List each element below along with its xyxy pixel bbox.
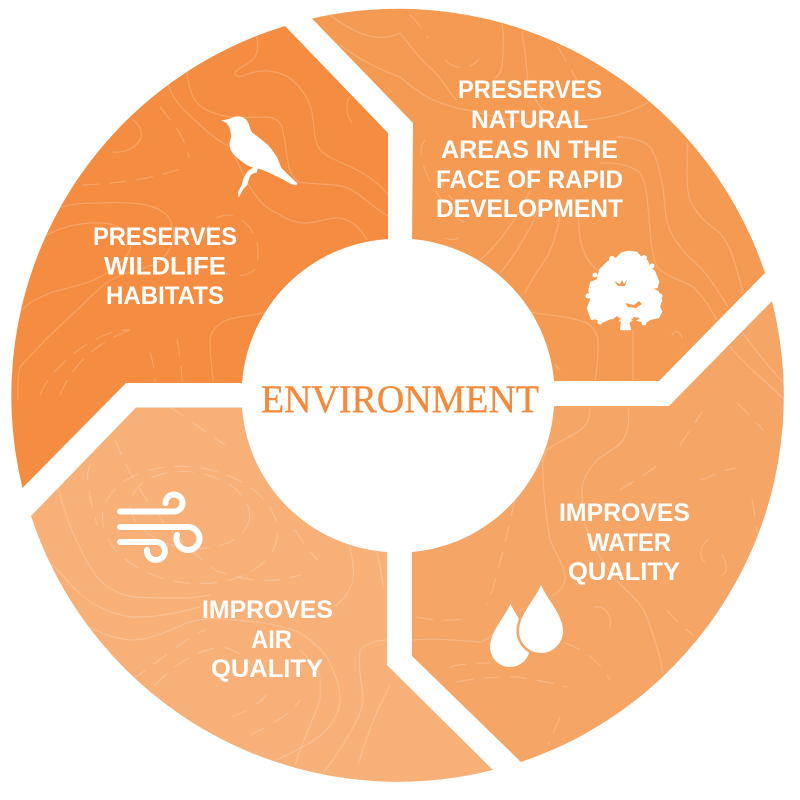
label: improves water quality: WATER — [587, 529, 671, 557]
label: preserves wildlife habitats: HABITATS — [106, 282, 224, 310]
label: preserves natural areas in the face of rapid development: PRESERVES — [458, 76, 602, 104]
label: improves air quality: QUALITY — [211, 655, 323, 683]
label: preserves wildlife habitats — [93, 223, 237, 310]
segment shape: water — [412, 301, 784, 762]
panel: improves water quality — [412, 301, 785, 762]
icon: bird — [221, 116, 298, 198]
label: preserves natural areas in the face of rapid development: DEVELOPMENT — [436, 195, 623, 223]
title: environment: ENVIRONMENT — [261, 378, 539, 421]
topographic contours: wildlife — [18, 37, 390, 400]
label: preserves wildlife habitats: PRESERVES — [93, 223, 237, 251]
label: improves water quality — [559, 499, 690, 586]
label: improves air quality: IMPROVES — [202, 596, 333, 624]
topographic contours: water — [413, 333, 785, 745]
topographic contours: natural areas — [330, 15, 743, 380]
segment shape: natural areas — [312, 9, 765, 381]
label: preserves natural areas in the face of rapid development — [436, 76, 623, 223]
icon: water drops — [490, 585, 563, 667]
panel: improves air quality — [31, 407, 493, 782]
label: preserves natural areas in the face of rapid development: AREAS IN THE — [441, 136, 618, 164]
segment shape: wildlife — [11, 26, 388, 488]
panel: preserves wildlife habitats — [11, 26, 390, 488]
label: preserves natural areas in the face of rapid development: NATURAL — [471, 106, 588, 134]
label: improves water quality: IMPROVES — [559, 499, 690, 527]
label: improves water quality: QUALITY — [568, 558, 680, 586]
topographic contours: air — [50, 407, 390, 773]
label: preserves natural areas in the face of rapid development: FACE OF RAPID — [436, 166, 623, 194]
panel: preserves natural areas — [312, 9, 765, 381]
label: improves air quality: AIR — [251, 626, 292, 654]
label: preserves wildlife habitats: WILDLIFE — [104, 252, 226, 280]
label: improves air quality — [202, 596, 333, 683]
icon: wind — [120, 494, 199, 560]
segment shape: air — [31, 408, 493, 782]
icon: tree — [586, 252, 662, 329]
